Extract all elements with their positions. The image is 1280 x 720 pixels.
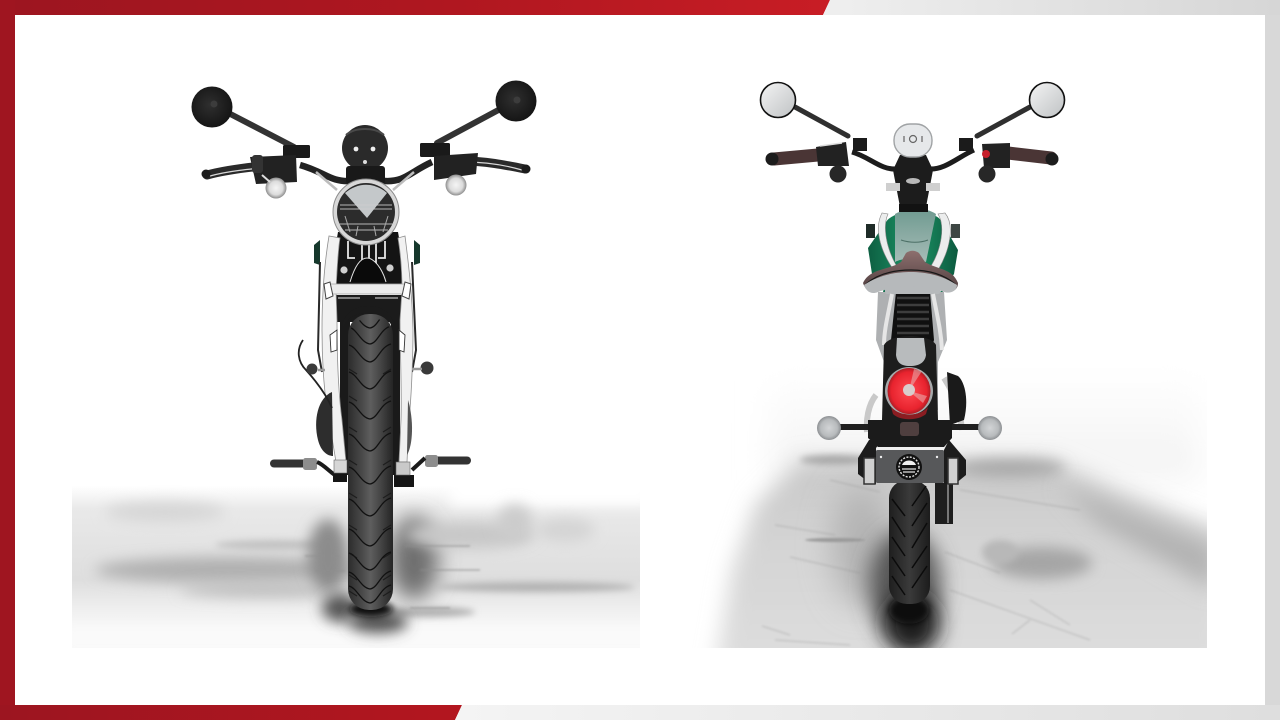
upper frame centre xyxy=(328,232,408,475)
ground: rear view concrete floor xyxy=(711,434,1207,648)
motorcycle: rear view xyxy=(760,82,1064,604)
plate bracket and rear tyre xyxy=(858,440,966,604)
left grip and switchgear xyxy=(766,138,867,182)
frame: top red bar xyxy=(0,0,830,15)
frame: bottom red bar xyxy=(0,705,462,720)
mirror: right silver xyxy=(977,82,1064,136)
frame: left red bar xyxy=(0,0,15,720)
right hand control and lever xyxy=(420,143,530,196)
front tyre with tread xyxy=(348,314,393,610)
seat xyxy=(863,251,958,293)
badge on plate xyxy=(896,454,922,480)
frame: top grey bar xyxy=(823,0,1280,15)
frame side rails xyxy=(322,236,413,462)
headlight xyxy=(333,179,399,245)
motorcycle: front view xyxy=(192,80,536,610)
mirror: left silver xyxy=(760,82,848,136)
handlebar xyxy=(300,162,432,181)
brake disc and rider pegs xyxy=(274,340,467,487)
indicator bar and lamps xyxy=(817,416,1002,447)
tail light xyxy=(885,367,933,419)
right grip and red switchgear xyxy=(959,138,1058,182)
instrument housing rear xyxy=(342,125,388,184)
frame: bottom grey bar xyxy=(455,705,1280,720)
rear fender xyxy=(867,336,966,432)
rear frame and suspension xyxy=(876,285,947,410)
ground: front view smudged floor xyxy=(72,492,640,648)
mirror: left black xyxy=(192,86,294,147)
left hand control and lever xyxy=(202,145,310,198)
frame: right grey bar xyxy=(1265,15,1280,720)
fuel tank with green panels xyxy=(866,204,960,283)
green side panels and cables xyxy=(314,172,420,372)
instrument cluster and top yoke xyxy=(886,124,940,207)
mirror: right black xyxy=(437,80,536,143)
handlebar xyxy=(852,150,974,169)
